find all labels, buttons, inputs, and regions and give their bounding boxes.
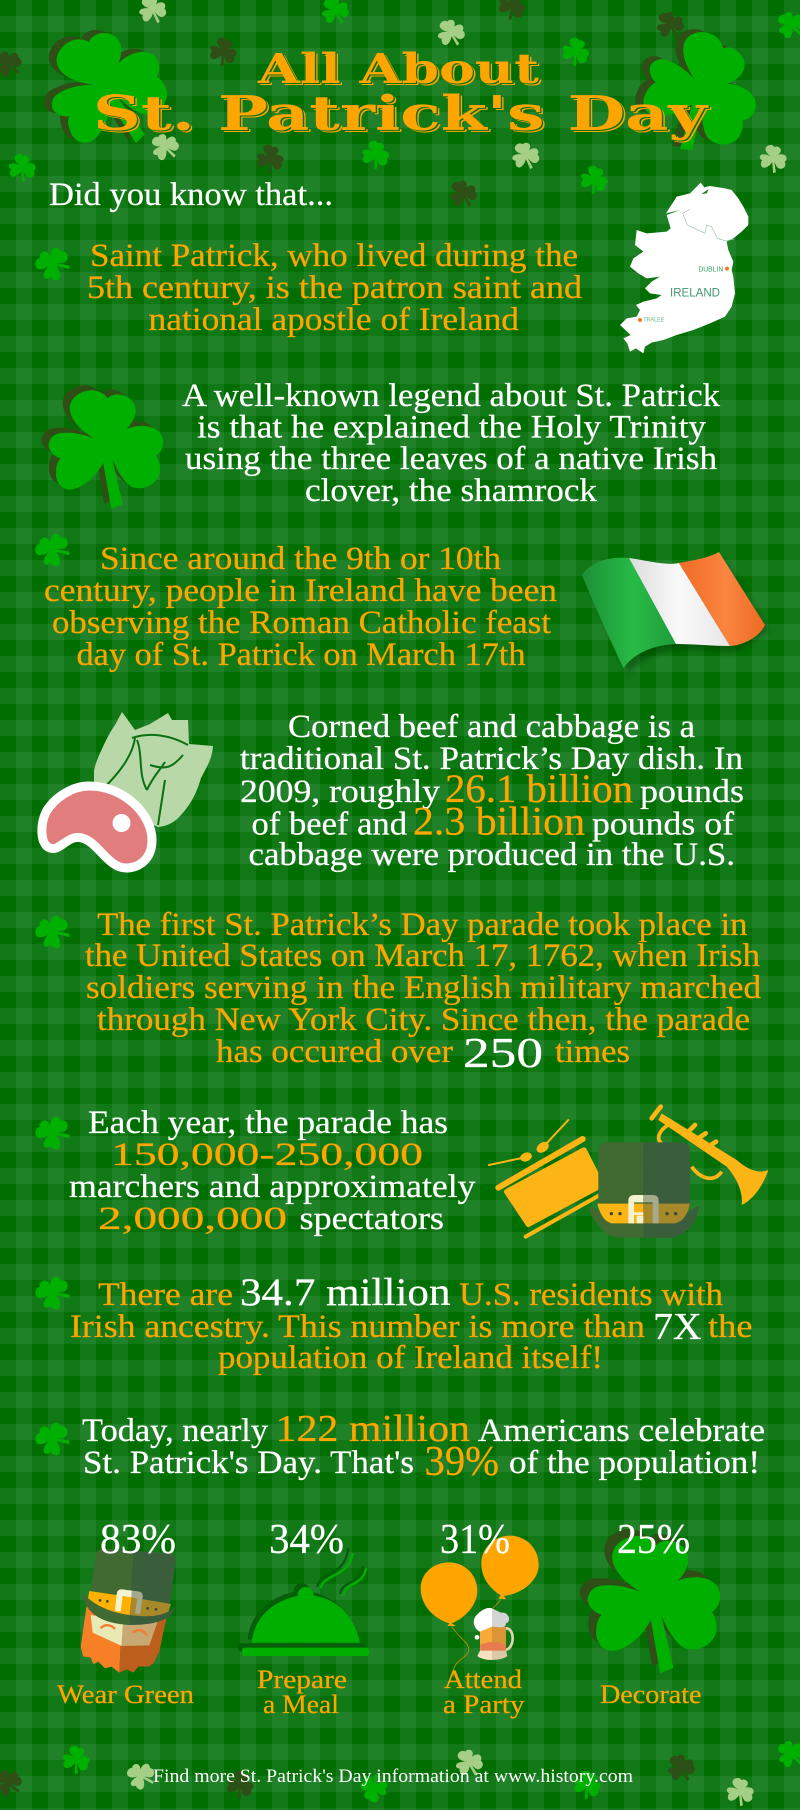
fact: corned beef and cabbage: pounds xyxy=(640,774,744,810)
fact: Irish ancestry: Irish ancestry. This number is more than xyxy=(70,1309,645,1345)
fact: feast day: day of St. Patrick on March 17th xyxy=(76,637,526,673)
fact: Americans celebrate: Today, nearly xyxy=(82,1413,269,1449)
fact: Irish ancestry: 34.7 million xyxy=(240,1271,450,1314)
fact: Americans celebrate: Americans celebrate xyxy=(478,1413,765,1449)
fact: legend: using the three leaves of a native Irish xyxy=(185,441,718,477)
label: Decorate: Decorate xyxy=(600,1680,702,1709)
fact: Saint Patrick xyxy=(87,238,583,338)
big shamrock right xyxy=(616,13,776,171)
fact: corned beef and cabbage: 26.1 billion xyxy=(445,766,633,811)
label: Attend a Party: a Party xyxy=(443,1690,524,1719)
fact: Irish ancestry: the xyxy=(708,1309,752,1345)
fact: marchers and spectators: marchers and approximately xyxy=(69,1169,476,1205)
fact: first parade: 250 xyxy=(463,1031,543,1077)
fact: legend xyxy=(182,378,721,509)
footer source line: Find more St. Patrick's Day information at www.history.com xyxy=(153,1766,633,1787)
fact: corned beef and cabbage: pounds of xyxy=(592,806,734,842)
bullet shamrock 1 xyxy=(31,242,75,286)
fact: first parade: has occured over xyxy=(216,1034,453,1070)
scattered shamrocks: top xyxy=(0,0,800,212)
fact: corned beef and cabbage: traditional St. Patrick’s Day dish. In xyxy=(240,741,743,777)
fact: Saint Patrick: national apostle of Ireland xyxy=(148,302,520,338)
bullet shamrock 5 xyxy=(31,1271,75,1315)
fact: Irish ancestry: U.S. residents with xyxy=(459,1277,724,1313)
fact: marchers and spectators: spectators xyxy=(300,1201,444,1237)
label: Attend a Party: Attend xyxy=(444,1665,522,1694)
icon: serving cloche xyxy=(238,1548,369,1656)
fact: corned beef and cabbage: 2009, roughly xyxy=(240,774,441,810)
label: Prepare a Meal: Prepare xyxy=(257,1665,347,1694)
fact: corned beef and cabbage: 2.3 billion xyxy=(413,798,585,844)
fact: corned beef and cabbage: cabbage were produced in the U.S. xyxy=(248,837,735,873)
icon: Ireland map: DUBLIN xyxy=(698,266,723,273)
fact: legend: clover, the shamrock xyxy=(305,473,598,509)
fact: first parade: through New York City. Since then, the parade xyxy=(97,1002,750,1038)
icon: Ireland map: IRELAND xyxy=(670,286,720,300)
bullet shamrock 3 xyxy=(31,910,75,954)
fact: Americans celebrate: of the population! xyxy=(509,1445,760,1481)
bullet shamrock 4 xyxy=(31,1111,75,1155)
fact: Americans celebrate: 39% xyxy=(424,1439,499,1485)
title: St. Patrick's Day xyxy=(93,86,710,142)
icon: shamrock with shadow xyxy=(42,385,163,509)
fact: marchers and spectators xyxy=(69,1105,476,1237)
stat: 31%: 31% xyxy=(440,1517,510,1563)
fact: marchers and spectators: 2,000,000 xyxy=(98,1201,287,1237)
fact: first parade xyxy=(85,907,762,1077)
title xyxy=(93,45,710,142)
fact: Irish ancestry xyxy=(70,1271,752,1376)
fact: Americans celebrate: 122 million xyxy=(276,1408,470,1450)
big shamrock left xyxy=(23,10,184,168)
fact: feast day: Since around the 9th or 10th xyxy=(100,541,502,577)
stat: 83%: 83% xyxy=(100,1517,176,1563)
fact: first parade: times xyxy=(555,1034,630,1070)
fact: first parade: the United States on March 17, 1762, when Irish xyxy=(85,938,761,974)
fact: first parade: The first St. Patrick’s Day parade took place in xyxy=(97,907,748,943)
label: Wear Green: Wear Green xyxy=(57,1680,194,1709)
fact: Americans celebrate: St. Patrick's Day. That's xyxy=(83,1445,414,1481)
fact: feast day: century, people in Ireland have been xyxy=(44,573,557,609)
fact: feast day xyxy=(44,541,557,673)
fact: Saint Patrick: 5th century, is the patron saint and xyxy=(87,270,583,306)
icon: decorate shamrock xyxy=(580,1529,720,1673)
fact: marchers and spectators: Each year, the parade has xyxy=(88,1105,448,1141)
scattered shamrocks: bottom xyxy=(0,1735,800,1807)
icon: drum, trumpet and hat xyxy=(489,1107,768,1238)
label: Prepare a Meal: a Meal xyxy=(263,1690,339,1719)
icon: balloons and beer xyxy=(421,1536,539,1677)
fact: legend: is that he explained the Holy Trinity xyxy=(197,410,707,446)
fact: corned beef and cabbage: Corned beef and cabbage is a xyxy=(288,709,695,745)
fact: first parade: soldiers serving in the English military marched xyxy=(86,970,762,1006)
fact: corned beef and cabbage: of beef and xyxy=(252,806,408,842)
stat: 25%: 25% xyxy=(617,1517,690,1563)
icon: Ireland map xyxy=(620,183,748,353)
fact: Irish ancestry: 7X xyxy=(653,1306,702,1348)
title: All About xyxy=(257,45,539,93)
fact: Irish ancestry: There are xyxy=(98,1277,233,1313)
intro heading: Did you know that... xyxy=(49,177,333,213)
bullet shamrock 2 xyxy=(31,528,75,572)
stat: 34%: 34% xyxy=(269,1517,344,1563)
fact: Irish ancestry: population of Ireland itself! xyxy=(218,1340,603,1376)
fact: marchers and spectators: 150,000-250,000 xyxy=(111,1137,423,1173)
fact: feast day: observing the Roman Catholic feast xyxy=(52,605,551,641)
icon: leprechaun xyxy=(81,1549,176,1673)
icon: cabbage and meat xyxy=(42,712,213,868)
fact: Saint Patrick: Saint Patrick, who lived during the xyxy=(90,238,578,274)
label: Attend a Party xyxy=(443,1665,524,1719)
bullet shamrock 6 xyxy=(31,1417,75,1461)
fact: legend: A well-known legend about St. Patrick xyxy=(182,378,721,414)
icon: Ireland map: TRALEE xyxy=(643,318,664,324)
label: Prepare a Meal xyxy=(257,1665,347,1719)
fact: Americans celebrate xyxy=(82,1408,765,1485)
icon: Irish flag xyxy=(582,552,769,674)
fact: corned beef and cabbage xyxy=(240,709,744,873)
